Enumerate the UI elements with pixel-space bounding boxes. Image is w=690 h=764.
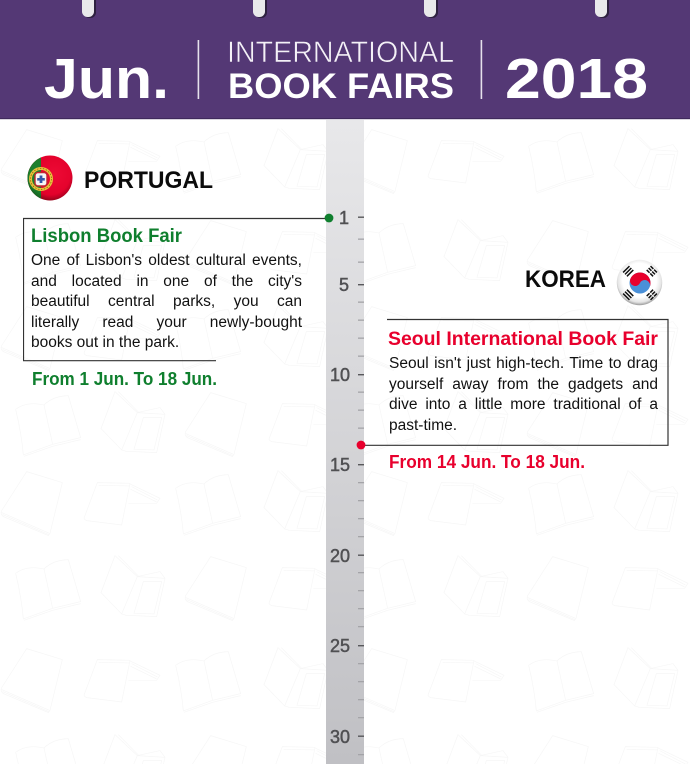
date marker dot [357, 441, 365, 449]
fair name: Lisbon Book Fair [31, 226, 183, 247]
date ruler: 25 [330, 636, 350, 656]
description: Seoul isn't just high-tech. Time to drag [389, 355, 658, 372]
description: One of Lisbon's oldest cultural events, [31, 252, 302, 269]
title line one: INTERNATIONAL [227, 36, 454, 69]
panel: Portugal [23, 156, 334, 389]
fair dates: From 14 Jun. To 18 Jun. [389, 452, 585, 472]
fair name: Seoul International Book Fair [388, 329, 659, 350]
date ruler: 15 [330, 455, 350, 475]
description: yourself away from the gadgets and [389, 376, 658, 393]
description: and located in one of the city's [31, 273, 302, 290]
connector box outline [362, 320, 668, 445]
flag of Portugal [27, 155, 72, 201]
date ruler: 1 [339, 208, 349, 228]
date ruler [326, 120, 364, 764]
country name: KOREA [525, 266, 606, 293]
connector box outline [24, 218, 326, 361]
description: past-time. [389, 417, 457, 434]
date marker dot [325, 214, 333, 222]
fair dates: From 1 Jun. To 18 Jun. [32, 369, 217, 389]
title line two: BOOK FAIRS [228, 67, 454, 106]
description: dive into a little more traditional of a [389, 396, 658, 413]
panel: Korea [356, 260, 669, 472]
description: books out in the park. [31, 334, 179, 351]
flag of Korea [617, 260, 662, 305]
description: beautiful central parks, you can [31, 293, 302, 310]
month: Jun. [44, 47, 169, 111]
date ruler: 30 [330, 727, 350, 747]
header banner [0, 0, 690, 120]
date ruler: 5 [339, 275, 349, 295]
country name: PORTUGAL [84, 167, 213, 194]
description [389, 355, 658, 434]
binder rings [82, 0, 609, 18]
date ruler: 20 [330, 546, 350, 566]
date ruler: 10 [330, 365, 350, 385]
description [31, 252, 302, 351]
description: literally read your newly-bought [31, 314, 302, 331]
year: 2018 [505, 47, 648, 111]
